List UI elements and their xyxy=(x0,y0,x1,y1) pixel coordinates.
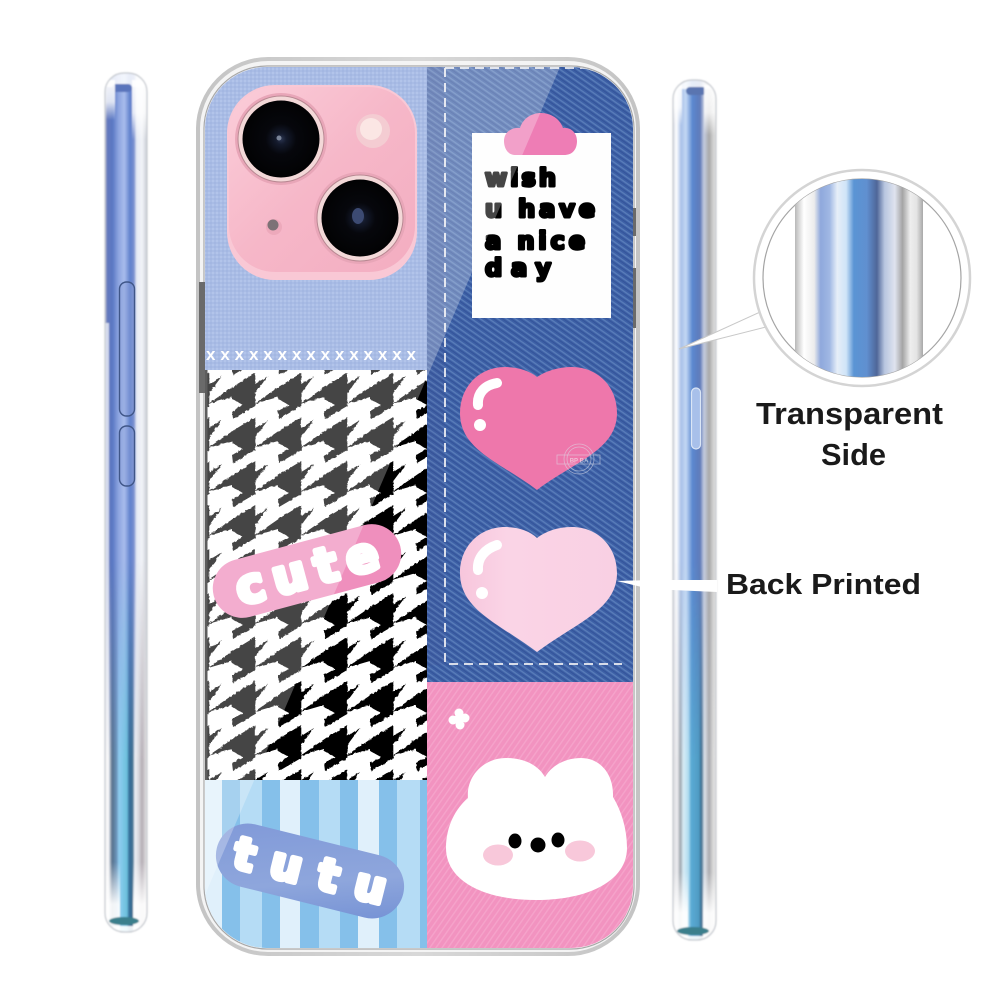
icon: flash xyxy=(356,114,390,148)
cute label: cute xyxy=(229,525,385,617)
tutu label: tutu xyxy=(228,828,392,915)
panel: houndstooth xyxy=(205,370,427,780)
right side view of phone case xyxy=(673,80,716,940)
label: transparent side: Side xyxy=(821,437,886,472)
panel: pink twill xyxy=(427,682,633,948)
panel: light denim xyxy=(205,67,427,370)
note text: a nice xyxy=(485,227,585,255)
icon: white bunny xyxy=(446,758,627,900)
note text xyxy=(485,164,595,282)
camera module xyxy=(227,85,417,280)
left side view of phone case xyxy=(105,73,147,932)
icon: power button xyxy=(692,388,700,449)
magnifier circle xyxy=(754,170,970,386)
cross stitch row: xxxxxxxxxxxxxxx xyxy=(206,345,417,364)
denim pocket stitching xyxy=(445,68,633,664)
case frame xyxy=(198,59,638,954)
icon: volume buttons xyxy=(120,282,134,486)
leader line xyxy=(617,580,717,592)
icon: microphone xyxy=(266,219,282,235)
icon: lens bottom xyxy=(314,172,406,264)
label: transparent side xyxy=(756,396,943,472)
callout: back printed xyxy=(617,569,921,601)
icon: sparkle xyxy=(448,708,470,730)
printed artwork xyxy=(190,67,633,948)
icon: light pink heart xyxy=(460,527,617,652)
note text: u have xyxy=(485,195,595,223)
watermark stamp: BP BA xyxy=(570,458,589,464)
glass reflection xyxy=(205,67,560,895)
sticky note xyxy=(472,113,611,318)
note text: day xyxy=(485,254,551,282)
callout: transparent side magnifier xyxy=(679,170,970,472)
panel: blue stripes xyxy=(205,780,427,948)
icon: cloud clip xyxy=(504,113,577,155)
phone case back xyxy=(190,59,638,954)
pointer xyxy=(679,312,766,349)
icon: pink heart xyxy=(460,367,617,490)
case side buttons xyxy=(199,208,636,393)
note text: wish xyxy=(485,164,556,192)
label: back printed: Back Printed xyxy=(726,569,921,601)
label: transparent side: Transparent xyxy=(756,396,943,431)
panel: dark denim pocket xyxy=(427,67,633,682)
icon: lens top xyxy=(235,93,327,185)
watermark stamp xyxy=(557,444,600,474)
